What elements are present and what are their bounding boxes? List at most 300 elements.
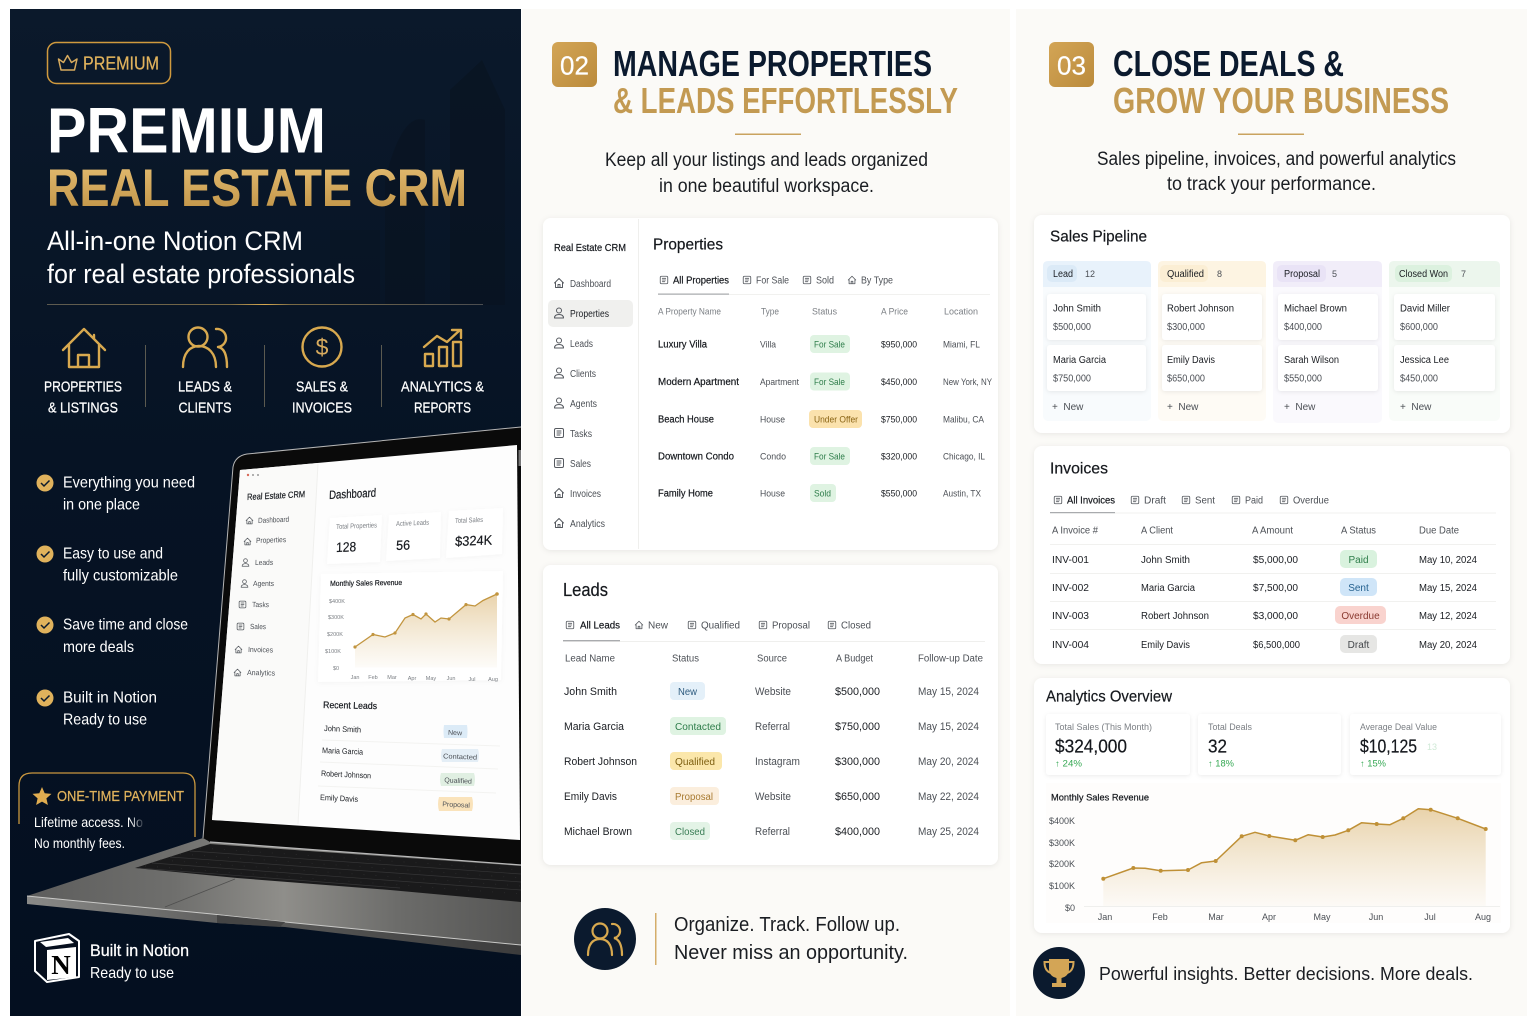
tagline: insights: Powerful insights. Better decisions. More deals. <box>1099 963 1473 984</box>
subtitle: to track your performance. <box>1167 174 1376 195</box>
card: David Miller <box>1394 294 1495 340</box>
sidebar: Invoices <box>570 489 601 500</box>
column: qualified: + New <box>1167 402 1199 413</box>
y axis labels: $200K <box>1049 859 1075 869</box>
row: Maria Garcia: Referral <box>755 721 790 733</box>
row: Downtown Condo: Chicago, IL <box>943 452 985 462</box>
screen stat: total properties <box>336 522 377 552</box>
row: Family Home: Sold <box>814 488 831 498</box>
icon: people <box>183 329 227 367</box>
stat: total deals: ↑ 18% <box>1208 758 1234 768</box>
icon: star <box>32 787 52 805</box>
panel: close deals <box>1016 9 1527 1016</box>
card: Robert Johnson: $300,000 <box>1167 322 1205 333</box>
row: Michael Brown: May 25, 2024 <box>918 826 979 838</box>
sidebar: Agents <box>570 399 597 410</box>
row: Maria Garcia: Maria Garcia <box>564 721 625 733</box>
y axis labels: $0 <box>1065 903 1075 913</box>
heading: CLOSE DEALS & <box>1113 43 1344 84</box>
row: John Smith <box>564 682 979 700</box>
row: INV-001: John Smith <box>1141 555 1190 566</box>
column: lead: + New <box>1052 402 1084 413</box>
table header <box>565 654 983 664</box>
benefit 1 <box>36 474 195 514</box>
icon: rising bar chart <box>424 330 461 366</box>
step badge 03 <box>1049 42 1094 87</box>
screen row: Robert Johnson: Robert Johnson <box>321 769 371 780</box>
row: Emily Davis: $650,000 <box>835 791 880 803</box>
tagline: organize: Never miss an opportunity. <box>674 942 908 964</box>
laptop base <box>27 838 521 945</box>
tabs: Sent <box>1195 496 1215 506</box>
callout: one-time payment: Lifetime access. No <box>34 814 143 830</box>
icon: trophy <box>1033 947 1085 999</box>
screen sidebar: Sales <box>250 622 266 631</box>
skyline backdrop <box>330 60 505 305</box>
row: Michael Brown: Referral <box>755 826 790 838</box>
tabs: New <box>648 620 669 632</box>
row: Family Home: Family Home <box>658 488 713 500</box>
feature: analytics and reports <box>401 330 484 416</box>
icon: house <box>63 329 105 367</box>
subtitle <box>1097 149 1456 195</box>
notion badge <box>35 934 189 982</box>
callout: one-time payment: No monthly fees. <box>34 835 125 851</box>
table header: Status <box>672 654 699 664</box>
panel: manage properties <box>522 9 1010 1016</box>
row: INV-001: $5,000,00 <box>1253 555 1298 566</box>
card: Sarah Wilson: Sarah Wilson <box>1284 355 1339 366</box>
row: INV-002: May 15, 2024 <box>1419 583 1477 594</box>
card: Jessica Lee <box>1394 345 1495 391</box>
x axis labels: Aug <box>1475 912 1491 922</box>
heading: GROW YOUR BUSINESS <box>1113 80 1449 121</box>
stat: total deals <box>1198 714 1341 775</box>
tabs: Overdue <box>1293 496 1329 506</box>
row: Family Home: Austin, TX <box>943 488 981 498</box>
screen list: recent leads <box>318 700 500 811</box>
panel: analytics overview: Analytics Overview <box>1046 688 1172 706</box>
laptop lid bezel <box>203 427 521 866</box>
screen chart: monthly sales revenue: $300K <box>328 615 344 621</box>
card: Sarah Wilson: $550,000 <box>1284 374 1322 384</box>
screen sidebar: Invoices <box>248 645 273 655</box>
screen row: Emily Davis: Emily Davis <box>320 793 358 804</box>
feature: leads and clients <box>178 328 232 416</box>
feature: properties and listings: PROPERTIES <box>44 378 122 396</box>
panel: leads table <box>543 565 998 865</box>
table header: A Amount <box>1252 526 1293 536</box>
panel: properties table <box>543 218 998 550</box>
row: Modern Apartment: Apartment <box>760 377 799 387</box>
screen row: Robert Johnson <box>321 769 475 786</box>
row: Emily Davis: Emily Davis <box>564 791 617 803</box>
row: Maria Garcia: $750,000 <box>835 721 880 733</box>
screen chart: monthly sales revenue: $200K <box>327 632 343 638</box>
tabs <box>658 276 990 295</box>
screen sidebar: Dashboard <box>258 515 289 525</box>
row: INV-003 <box>1052 606 1477 624</box>
stat: total deals: 32 <box>1208 736 1227 756</box>
screen title: Dashboard <box>329 486 376 502</box>
row: Modern Apartment: $450,000 <box>881 377 917 387</box>
tabs: All Invoices <box>1067 496 1115 506</box>
table header: A Property Name <box>658 306 721 316</box>
column: lead <box>1043 261 1151 421</box>
screen chart: monthly sales revenue <box>325 580 499 682</box>
screen row: Maria Garcia: Maria Garcia <box>322 746 364 757</box>
table header: A Client <box>1141 526 1173 536</box>
feature: sales and invoices: INVOICES <box>292 400 352 416</box>
tabs <box>1050 496 1496 514</box>
row: Luxury Villa: Luxury Villa <box>658 340 707 350</box>
screen row: Maria Garcia <box>322 746 479 762</box>
screen stat: total sales <box>455 517 492 547</box>
row: Beach House <box>658 410 984 428</box>
title <box>47 94 467 218</box>
trackpad <box>165 879 235 907</box>
subtitle: Keep all your listings and leads organized <box>605 150 928 171</box>
row: Luxury Villa: For Sale <box>814 340 845 350</box>
benefit 3 <box>36 616 188 656</box>
title: REAL ESTATE CRM <box>47 159 467 218</box>
screen chart: monthly sales revenue: Feb <box>368 675 378 681</box>
stat: average deal value: ↑ 15% <box>1360 758 1386 768</box>
row: Luxury Villa: Villa <box>760 340 776 350</box>
screen stat: total sales: $324K <box>455 533 492 549</box>
feature: leads and clients: LEADS & <box>178 378 232 396</box>
badge: premium <box>48 42 170 84</box>
row: Emily Davis: Proposal <box>675 792 713 803</box>
row: Luxury Villa: Miami, FL <box>943 340 980 350</box>
card: Emily Davis: Emily Davis <box>1167 355 1215 366</box>
card: Emily Davis: $650,000 <box>1167 374 1205 384</box>
card: John Smith: $500,000 <box>1053 322 1091 333</box>
row: Robert Johnson <box>564 752 979 770</box>
card: Robert Johnson <box>1162 294 1262 340</box>
row: INV-004: $6,500,000 <box>1253 640 1300 651</box>
sidebar: Tasks <box>570 429 592 440</box>
chart: monthly sales revenue <box>1046 783 1501 923</box>
row: Robert Johnson: May 20, 2024 <box>918 756 979 768</box>
keyboard <box>135 844 521 902</box>
tagline: insights <box>1033 947 1473 999</box>
laptop <box>27 427 521 955</box>
card: Robert Johnson: Robert Johnson <box>1167 304 1234 314</box>
row: Downtown Condo: Condo <box>760 452 786 462</box>
benefits list <box>36 474 195 728</box>
panel: sales pipeline: Sales Pipeline <box>1050 228 1147 246</box>
row: John Smith: Website <box>755 686 791 698</box>
row: Beach House: House <box>760 414 785 424</box>
row: Downtown Condo: For Sale <box>814 452 845 462</box>
benefit 4: Ready to use <box>63 712 147 728</box>
card: Maria Garcia: $750,000 <box>1053 374 1091 384</box>
screen chart: monthly sales revenue: Monthly Sales Revenue <box>330 578 402 588</box>
row: Robert Johnson: Robert Johnson <box>564 756 637 768</box>
card: David Miller: $600,000 <box>1400 322 1438 333</box>
table header <box>1052 526 1459 536</box>
row: John Smith: New <box>678 687 698 698</box>
row: INV-003: $3,000,00 <box>1253 611 1298 622</box>
row: INV-002: Maria Garcia <box>1141 583 1195 594</box>
data points <box>1101 808 1488 881</box>
row: INV-004 <box>1052 635 1477 653</box>
stat: average deal value: Average Deal Value <box>1360 722 1437 732</box>
screen stat: active leads: Active Leads <box>396 520 430 528</box>
panel: analytics overview <box>1034 678 1510 933</box>
column: qualified: Qualified <box>1167 269 1204 280</box>
row: John Smith: John Smith <box>564 686 617 698</box>
screen sidebar: Leads <box>255 558 273 567</box>
row: Modern Apartment <box>658 372 992 390</box>
table header: Due Date <box>1419 526 1459 536</box>
row: INV-003: May 12, 2024 <box>1419 611 1477 622</box>
benefit 4: Built in Notion <box>63 690 157 706</box>
screen sidebar <box>234 489 305 678</box>
y axis labels: $300K <box>1049 838 1075 848</box>
row: Family Home <box>658 484 981 502</box>
icon: crown <box>58 56 77 70</box>
row: John Smith: $500,000 <box>835 686 880 698</box>
heading <box>1113 43 1449 121</box>
screen row: Emily Davis <box>320 793 473 811</box>
row: Robert Johnson: Qualified <box>675 757 715 768</box>
column: closed won: 7 <box>1461 269 1466 279</box>
row: Downtown Condo <box>658 447 985 465</box>
table header: A Invoice # <box>1052 526 1098 536</box>
notion badge: Built in Notion <box>90 941 189 960</box>
tabs: Sold <box>816 276 834 286</box>
step badge 03: 03 <box>1057 50 1086 80</box>
x axis labels: Jun <box>1369 912 1383 922</box>
icon: dollar coin: $ <box>316 334 329 360</box>
table header: Location <box>944 306 978 316</box>
screen chart: monthly sales revenue: Jul <box>468 677 476 683</box>
tagline: organize <box>574 908 908 970</box>
row: INV-003: Robert Johnson <box>1141 611 1209 622</box>
row: John Smith: May 15, 2024 <box>918 686 979 698</box>
row: Michael Brown: $400,000 <box>835 826 880 838</box>
heading <box>613 43 958 121</box>
panel: invoices: Invoices <box>1050 460 1108 478</box>
x axis labels: Mar <box>1208 912 1224 922</box>
row: Emily Davis <box>564 787 979 805</box>
laptop screen <box>212 445 521 840</box>
feature: analytics and reports: ANALYTICS & <box>401 378 484 396</box>
sidebar: Clients <box>570 369 596 380</box>
sidebar: Sales <box>570 459 591 470</box>
callout: one-time payment: ONE-TIME PAYMENT <box>57 789 184 805</box>
screen sidebar: Agents <box>253 579 274 588</box>
column: closed won: Closed Won <box>1399 269 1448 280</box>
icon: notion cube: N <box>51 950 71 980</box>
feature: analytics and reports: REPORTS <box>414 400 471 416</box>
row: INV-004: INV-004 <box>1052 640 1089 651</box>
row: Beach House: Under Offer <box>814 414 858 424</box>
table header: A Status <box>1341 526 1376 536</box>
benefit 2: Easy to use and <box>63 546 163 562</box>
column: proposal: 5 <box>1332 269 1337 279</box>
row: INV-002 <box>1052 578 1477 596</box>
tabs: Draft <box>1144 496 1166 506</box>
card: John Smith <box>1047 294 1146 340</box>
tabs: For Sale <box>756 276 789 286</box>
table header: A Price <box>881 306 908 316</box>
benefit 1: in one place <box>63 496 140 514</box>
table header: Lead Name <box>565 654 615 664</box>
panel: properties table: Properties <box>653 236 723 254</box>
screen row: John Smith: New <box>448 730 463 737</box>
row: Maria Garcia: May 15, 2024 <box>918 721 979 733</box>
row: Downtown Condo: $320,000 <box>881 452 917 462</box>
row: Robert Johnson: Instagram <box>755 756 800 768</box>
icon: people badge <box>574 908 636 970</box>
row: INV-001: Paid <box>1348 555 1369 566</box>
stat: average deal value: $10,125 <box>1360 736 1417 756</box>
table header: Status <box>812 306 837 316</box>
callout: one-time payment <box>19 773 195 851</box>
row: INV-001 <box>1052 550 1477 568</box>
x axis labels: Jul <box>1424 912 1436 922</box>
screen row: John Smith: John Smith <box>324 724 361 734</box>
screen row: John Smith <box>324 724 468 738</box>
feature: sales and invoices <box>292 328 352 416</box>
screen chart: monthly sales revenue: Jun <box>447 676 455 682</box>
screen chart: monthly sales revenue: Mar <box>387 675 397 681</box>
row: Emily Davis: May 22, 2024 <box>918 791 979 803</box>
stat: total deals: Total Deals <box>1208 722 1252 732</box>
sidebar: Dashboard <box>570 279 611 290</box>
screen stat: active leads: 56 <box>396 537 410 553</box>
row: Beach House: $750,000 <box>881 414 917 424</box>
row: Family Home: House <box>760 488 785 498</box>
row: INV-003: Overdue <box>1341 611 1380 622</box>
screen chart: monthly sales revenue: $400K <box>329 599 345 605</box>
sidebar: Real Estate CRM <box>554 242 626 254</box>
icon: notion cube <box>35 934 79 982</box>
row: INV-001: INV-001 <box>1052 555 1089 566</box>
column: qualified <box>1158 261 1266 421</box>
screen row: Robert Johnson: Qualified <box>444 777 472 786</box>
row: Family Home: $550,000 <box>881 488 917 498</box>
row: Modern Apartment: For Sale <box>814 377 845 387</box>
row: INV-002: $7,500,00 <box>1253 583 1298 594</box>
row: Modern Apartment: Modern Apartment <box>658 377 739 388</box>
tabs: Paid <box>1245 496 1263 506</box>
row: Michael Brown <box>564 822 979 840</box>
subtitle: for real estate professionals <box>47 259 355 289</box>
y axis labels: $400K <box>1049 816 1075 826</box>
table header: Follow-up Date <box>918 654 983 664</box>
card: Michael Brown: $400,000 <box>1284 322 1322 333</box>
stat: total sales: Total Sales (This Month) <box>1055 722 1152 732</box>
tabs: Proposal <box>772 620 810 632</box>
x axis labels: Jan <box>1098 912 1112 922</box>
feature: leads and clients: CLIENTS <box>178 400 232 416</box>
screen stat: total properties: 128 <box>336 539 356 555</box>
screen chart: monthly sales revenue: $0 <box>333 666 339 672</box>
notion badge: Ready to use <box>90 965 174 982</box>
step badge 02: 02 <box>560 50 589 80</box>
feature: properties and listings: & LISTINGS <box>48 400 118 416</box>
screen row: Emily Davis: Proposal <box>442 801 470 810</box>
tabs: Qualified <box>701 620 740 632</box>
subtitle <box>605 150 928 197</box>
x axis labels <box>1098 912 1491 922</box>
stat: average deal value <box>1350 714 1501 775</box>
benefit 2: fully customizable <box>63 568 178 584</box>
screen sidebar: Real Estate CRM <box>247 489 305 502</box>
row: Beach House: Malibu, CA <box>943 414 984 424</box>
tabs <box>563 620 985 642</box>
card: Maria Garcia: Maria Garcia <box>1053 355 1106 366</box>
step badge 02 <box>552 42 597 87</box>
row: INV-004: May 20, 2024 <box>1419 640 1477 651</box>
card: John Smith: John Smith <box>1053 304 1101 314</box>
row: INV-004: Draft <box>1348 640 1370 651</box>
screen sidebar: Properties <box>256 535 286 545</box>
row: INV-003: INV-003 <box>1052 611 1089 622</box>
chart: monthly sales revenue: Monthly Sales Revenue <box>1051 792 1149 802</box>
stat: average deal value: 13 <box>1427 742 1437 752</box>
screen chart: monthly sales revenue: Jan <box>351 675 359 681</box>
tabs: By Type <box>861 276 893 286</box>
row: Michael Brown: Michael Brown <box>564 826 632 838</box>
card: Jessica Lee: Jessica Lee <box>1400 355 1449 366</box>
panel: hero <box>10 9 521 1016</box>
screen stat: active leads <box>396 520 429 550</box>
benefit 1: Everything you need <box>63 474 195 492</box>
sidebar: Properties <box>570 309 609 320</box>
y axis labels <box>1049 816 1075 913</box>
heading: & LEADS EFFORTLESSLY <box>613 80 958 121</box>
subtitle: All-in-one Notion CRM <box>47 226 303 256</box>
table header: Source <box>757 654 787 664</box>
screen chart: monthly sales revenue: May <box>426 676 436 682</box>
screen stat: total properties: Total Properties <box>336 522 378 531</box>
sidebar: Analytics <box>570 519 605 530</box>
screen chart: monthly sales revenue: Apr <box>408 676 416 682</box>
row: Maria Garcia <box>564 717 979 735</box>
tabs: All Properties <box>673 276 729 286</box>
benefit 3: more deals <box>63 639 134 656</box>
card: Maria Garcia <box>1047 345 1146 391</box>
benefit 4 <box>36 690 157 728</box>
panel: invoices <box>1034 446 1510 664</box>
card: David Miller: David Miller <box>1400 304 1451 314</box>
base front edge <box>27 896 521 955</box>
card: Michael Brown <box>1278 294 1378 340</box>
screen chart: monthly sales revenue: $100K <box>325 649 341 655</box>
screen stat: total sales: Total Sales <box>455 517 484 525</box>
card: Sarah Wilson <box>1278 345 1378 391</box>
screen chart: monthly sales revenue: Aug <box>488 677 498 683</box>
column: qualified: 8 <box>1217 269 1222 279</box>
column: proposal: Proposal <box>1284 269 1320 280</box>
subtitle: in one beautiful workspace. <box>659 176 874 197</box>
title: PREMIUM <box>47 94 326 166</box>
subtitle <box>47 226 355 289</box>
x axis labels: Apr <box>1262 912 1276 922</box>
benefit 2 <box>36 546 178 584</box>
column: closed won: + New <box>1400 402 1432 413</box>
hinge highlight <box>210 842 521 865</box>
stat: total sales: ↑ 24% <box>1055 758 1082 768</box>
table header: A Budget <box>836 654 873 664</box>
feature: sales and invoices: SALES & <box>296 378 348 396</box>
column: closed won <box>1389 261 1500 421</box>
